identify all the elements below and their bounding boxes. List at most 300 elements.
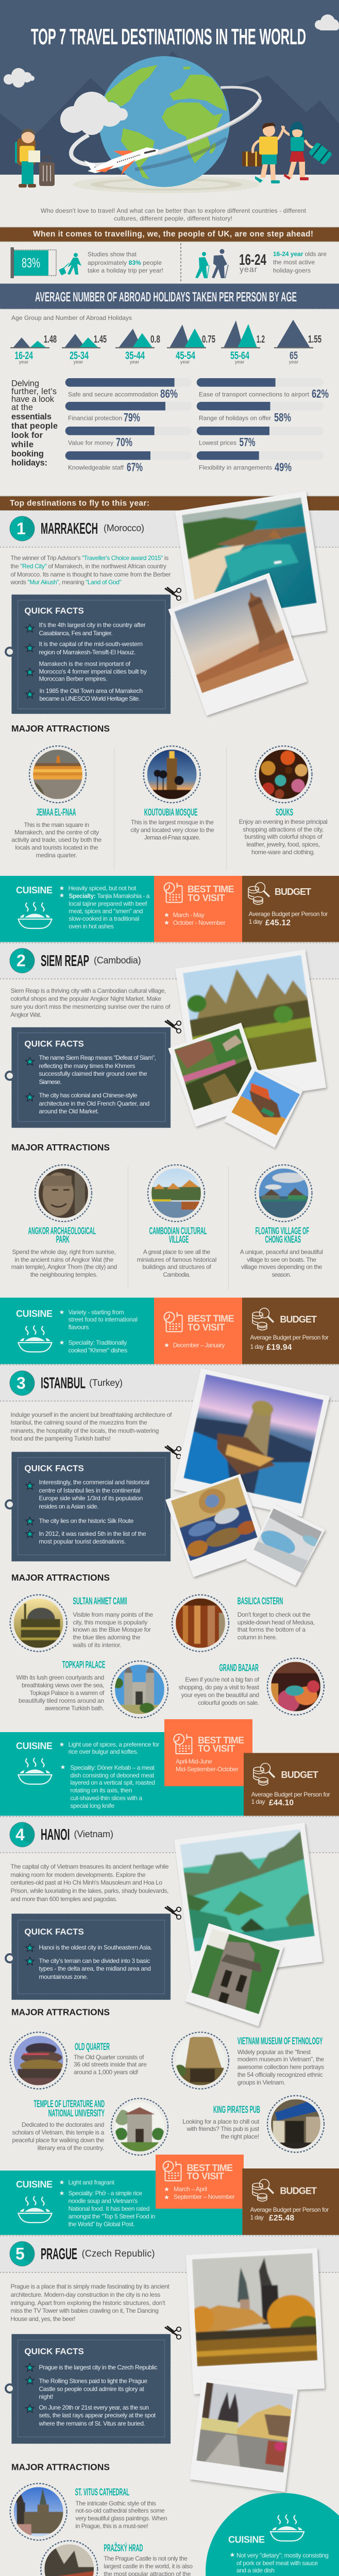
strip: best time to visit: TO VISIT	[187, 2171, 224, 2181]
description: minarets, the hospitality of the locals, the mouth-watering	[10, 1427, 159, 1434]
chart: booking essentials bars	[65, 378, 329, 474]
city name: (Czech Republic)	[82, 2248, 155, 2259]
orbit ring front	[71, 99, 260, 170]
quick facts: Castle so people could admire its glory at	[39, 2385, 144, 2393]
city name: MARRAKECH	[41, 519, 98, 537]
attraction: Cambodian Cultural Village: Cambodia.	[163, 1271, 191, 1278]
strip: budget: 1 day	[250, 1343, 264, 1350]
quick facts: QUICK FACTS	[24, 1927, 84, 1937]
city name: (Cambodia)	[94, 955, 141, 965]
strip: cuisine	[0, 876, 154, 942]
description: making room for modern developments. Explore the	[10, 1871, 146, 1878]
attraction: Vietnam Museum of Ethnology: Widely popular as the "finest	[238, 2048, 311, 2056]
attraction: Topkapi Palace: With its lush green courtyards and	[16, 1674, 104, 1681]
attraction: Temple of Literature: NATIONAL UNIVERSITY	[48, 2108, 105, 2119]
attraction: King Pirates Pub: Looking for a place to chill out	[182, 2118, 260, 2125]
text block: delving further: booking	[11, 449, 44, 459]
text block: delving further	[11, 379, 58, 468]
chart: holidays by age group: year	[235, 360, 244, 365]
description: food and the pampering Turkish baths!	[10, 1435, 111, 1442]
description: Indulge yourself in the ancient but breathtaking architecture of	[10, 1411, 172, 1418]
polaroid: Angkor Wat	[175, 950, 326, 1107]
chart: holidays by age group: 1.45	[94, 334, 107, 345]
strip: cuisine: noodle soup and Vietnam's	[69, 2197, 138, 2205]
attraction: St. Vitus Cathedral: in Prague, this is a must-see!	[75, 2522, 148, 2530]
stat: 83%	[10, 247, 163, 278]
quick facts: mountainous zone.	[39, 1973, 88, 1980]
attraction: Topkapi Palace: awesome Turkish bath.	[45, 1705, 104, 1712]
attraction: Prazsky Hrad	[41, 2541, 195, 2576]
attraction: Vietnam Museum of Ethnology: the 54 officially recognized ethnic	[238, 2071, 323, 2078]
quick facts	[5, 1020, 181, 1128]
attraction: Old Quarter	[10, 2032, 147, 2089]
polaroid: ceramic bowls	[165, 1474, 268, 1577]
attraction: Temple of Literature: literary era of the country.	[38, 2144, 104, 2151]
icon: hikers	[195, 249, 228, 278]
strip: cuisine: layered on a vertical spit, roasted	[70, 1779, 155, 1786]
attraction: Koutoubia Mosque: KOUTOUBIA MOSQUE	[144, 807, 198, 818]
attraction: St. Vitus Cathedral: not-so-old cathedral shelters some	[75, 2507, 165, 2514]
chart: holidays by age group: 16-24	[14, 350, 33, 362]
attraction: Prazsky Hrad: The Prague Castle is not only the	[104, 2555, 188, 2562]
strip: cuisine: flavours	[69, 1324, 89, 1331]
attraction: Souks: bursting with colorful shops of	[245, 833, 323, 840]
quick facts: It is the capital of the mid-south-western	[39, 640, 143, 648]
attraction: Old Quarter: OLD QUARTER	[75, 2042, 110, 2053]
strip: best time to visit: TO VISIT	[188, 1323, 225, 1333]
panel: 2 Siem Reap	[0, 942, 339, 1364]
attraction: Basilica Cistern: BASILICA CISTERN	[238, 1596, 283, 1607]
attraction: Cambodian Cultural Village: VILLAGE	[169, 1234, 189, 1245]
number badge	[10, 1371, 35, 1396]
text block: delving further: while	[11, 440, 33, 449]
subheading: age group: Age Group and Number of Abroad Holidays	[11, 314, 132, 321]
attraction: St. Vitus Cathedral	[10, 2483, 167, 2540]
strip: best time to visit	[156, 2155, 244, 2209]
description	[10, 1411, 172, 1442]
attraction: King Pirates Pub	[182, 2096, 324, 2153]
quick facts: The city has colonial and Chinese-style	[39, 1092, 138, 1099]
description: sure you don't miss the mesmerizing sunrise over the ruins of	[10, 1003, 171, 1010]
description: House and, yes, the beer!	[10, 2315, 75, 2323]
attraction: Souks: SOUKS	[276, 807, 293, 818]
panel: 4 Hanoi	[0, 1816, 339, 2235]
globe	[99, 56, 230, 187]
attraction: Grand Bazaar: colourful goods on sale.	[198, 1699, 259, 1706]
attraction: Topkapi Palace	[16, 1660, 168, 1718]
text block: delving further: that people	[11, 421, 58, 431]
attraction: Topkapi Palace: breathtaking views over the sea,	[22, 1682, 104, 1689]
description: colorful shops and the popular Angkor Night Market. Make	[10, 995, 161, 1003]
polaroid: Pamukkale	[246, 1504, 326, 1586]
chart: holidays by age group: year	[130, 360, 139, 365]
description: Istanbul, the calming sound of the muezzins from the	[10, 1419, 147, 1426]
attraction: Vietnam Museum of Ethnology: modern museum in Vietnam", the	[238, 2056, 324, 2063]
quick facts: The name Siem Reap means "Defeat of Siam",	[39, 1054, 156, 1061]
text: Studies show that	[88, 250, 137, 258]
city name: SIEM REAP	[41, 952, 89, 970]
description	[10, 2283, 170, 2323]
strip: budget: £44.10	[269, 1799, 294, 1807]
strip: cuisine: National food. It has been rated	[69, 2205, 149, 2212]
strip: budget: Average Budget per Person for	[250, 2206, 329, 2213]
attraction: Temple of Literature: TEMPLE OF LITERATURE AND	[34, 2099, 105, 2110]
banner: top destinations: Top destinations to fly to this year:	[10, 499, 149, 508]
orbit ring back	[221, 87, 260, 99]
description	[10, 1863, 169, 1903]
attraction: Souks: shopping attractions of the city,	[243, 826, 324, 833]
strip: best time to visit	[164, 1719, 252, 1786]
quick facts	[5, 1446, 181, 1562]
quick facts: In 2012, it was ranked 5th in the list of the	[39, 1530, 146, 1537]
strip: budget: Average Budget per Person for	[249, 910, 328, 918]
polaroid: Koutoubia tower	[168, 573, 307, 716]
strip: cuisine: Heavily spiced, but not hot	[69, 885, 137, 892]
city name: (Turkey)	[89, 1378, 123, 1388]
banner: UK one step ahead: When it comes to travelling, we, the people of UK, are one step ahead!	[33, 230, 313, 239]
strip: best time to visit: BEST TIME	[198, 1735, 244, 1745]
text block: delving further: essentials	[11, 412, 52, 421]
chart: booking essentials bars: 79%	[124, 411, 140, 424]
description: words "Mur Akush", meaning "Land of God"	[10, 579, 122, 586]
strip: budget: Average Budget per Person for	[251, 1791, 330, 1798]
chart: booking essentials bars: 58%	[274, 411, 291, 424]
strip: best time to visit	[154, 1298, 242, 1364]
chart: holidays by age group: 1.48	[44, 334, 57, 345]
strip: cuisine: Light and fragrant	[69, 2179, 115, 2186]
number badge: 2	[16, 952, 26, 970]
description: Angkor Wat.	[10, 1011, 41, 1019]
quick facts: sets, the last rays appear precisely at the spot	[39, 2412, 156, 2419]
number badge	[10, 2242, 35, 2266]
attraction: Cambodian Cultural Village: CAMBODIAN CULTURAL	[149, 1226, 207, 1237]
text block: delving further: holidays:	[11, 459, 47, 468]
characters: high-fiving couple	[242, 122, 333, 183]
mountains	[0, 51, 339, 175]
strip: best time to visit: December – January	[173, 1342, 225, 1349]
description	[10, 987, 171, 1019]
quick facts: became a UNESCO World Heritage Site.	[39, 695, 140, 702]
attraction: Vietnam Museum of Ethnology: groups in Vietnam.	[238, 2079, 285, 2086]
strip: cuisine: CUISINE	[16, 1309, 53, 1319]
suitcase	[39, 157, 55, 186]
attraction: King Pirates Pub: KING PIRATES PUB	[213, 2105, 260, 2115]
stat: 16-24 year olds: 16-24 year olds are	[273, 250, 327, 258]
attraction: Basilica Cistern: column in here.	[238, 1634, 277, 1641]
quick facts: On June 20th or 21st every year, as the sun	[39, 2404, 149, 2411]
strip: budget	[242, 876, 339, 942]
airplane	[84, 147, 159, 182]
strip: budget: £45.12	[265, 919, 291, 927]
attraction: Basilica Cistern	[172, 1595, 315, 1652]
strip: best time to visit: BEST TIME	[187, 2163, 233, 2173]
quick facts: QUICK FACTS	[24, 1464, 84, 1473]
heading: average number of abroad holidays	[0, 283, 339, 309]
chart: booking essentials bars: Range of holidays on offer	[199, 414, 271, 421]
callout: cuisine circle: of pork or beef meat with sauce	[236, 2560, 318, 2567]
chart: booking essentials bars: 62%	[312, 387, 329, 400]
attraction: Grand Bazaar: GRAND BAZAAR	[219, 1663, 259, 1674]
description	[10, 554, 171, 586]
attraction: Sultan Ahmet Camii: SULTAN AHMET CAMII	[73, 1596, 127, 1607]
quick facts: Hanoi is the oldest city in Southeastern Asia.	[39, 1944, 152, 1951]
city name: PRAGUE	[41, 2245, 77, 2263]
stat: 83%: 83%	[22, 255, 40, 270]
chart: holidays by age group: 1.2	[257, 334, 265, 345]
heading: major attractions: MAJOR ATTRACTIONS	[11, 723, 110, 734]
strip: best time to visit	[154, 876, 242, 942]
attraction: Prazsky Hrad: PRAŽSKÝ HRAD	[104, 2543, 143, 2554]
quick facts: Morocco's 4 former imperial cities built by	[39, 668, 147, 675]
attraction: Cambodian Cultural Village: A great place to see all the	[143, 1248, 211, 1256]
attraction: Koutoubia Mosque: city and located very close to the	[130, 826, 214, 834]
attraction: Prazsky Hrad: largest castle in the world, it is also	[104, 2563, 193, 2570]
chart: holidays by age group: 25-34	[70, 350, 89, 362]
quick facts: Interestingly, the commercial and historical	[39, 1479, 149, 1486]
attraction: Sultan Ahmet Camii: walls of its interior.	[72, 1641, 122, 1649]
chart: booking essentials bars: 70%	[116, 435, 132, 449]
strip: budget: £19.94	[266, 1343, 292, 1352]
quick facts: In 1985 the Old Town area of Marrakech	[39, 687, 143, 694]
attraction: Koutoubia Mosque: This is the largest mosque in the	[131, 819, 214, 826]
attraction: Floating Village of Chong Kneas: village moves depending on the	[241, 1263, 323, 1270]
strip: budget	[242, 1298, 339, 1364]
icon: walker with suitcase	[59, 253, 81, 276]
quick facts: Moroccan Berber empires.	[39, 675, 107, 682]
polaroid: Charles Bridge	[186, 2248, 325, 2394]
panel: 3 Istanbul	[0, 1364, 339, 1816]
chart: booking essentials bars: Ease of transport connections to airport	[199, 391, 310, 398]
quick facts: The Rolling Stones paid to light the Prague	[39, 2377, 147, 2384]
quick facts: QUICK FACTS	[24, 2346, 84, 2357]
quick facts: QUICK FACTS	[24, 606, 84, 616]
attraction: Old Quarter: 36 old streets inside that are	[74, 2061, 147, 2068]
attraction: Temple of Literature	[12, 2098, 168, 2155]
number badge	[10, 516, 35, 541]
attraction: Koutoubia Mosque	[130, 746, 214, 841]
strip: best time to visit: September – November	[174, 2193, 235, 2200]
strip: cuisine	[0, 2171, 242, 2235]
attraction: Souks: leather, jewelry, food, spices,	[246, 841, 320, 848]
attraction: Angkor Archaeological Park	[11, 1165, 117, 1278]
polaroid: Maiden's Tower resort	[173, 1368, 330, 1517]
chart: holidays by age group: 1.55	[308, 334, 321, 345]
strip: cuisine	[0, 1298, 154, 1364]
quick facts: architecture in the Old French Quarter, and	[39, 1100, 149, 1107]
quick facts: Casablanca, Fes and Tangier.	[39, 630, 112, 637]
strip: cuisine: meat, spices and "smen" and	[69, 908, 143, 915]
chart: booking essentials bars: Safe and secure accommodation	[68, 391, 158, 398]
strip: budget: 1 day	[251, 1798, 265, 1805]
attraction: Floating Village of Chong Kneas: village to see on boats. The	[247, 1256, 316, 1263]
city name: (Vietnam)	[74, 1829, 113, 1839]
strip: cuisine: special long knife	[70, 1802, 114, 1809]
polaroid: Thap Rua turtle tower	[185, 1923, 283, 2026]
attraction: Floating Village of Chong Kneas: A unique, peaceful and beautiful	[240, 1248, 323, 1256]
chart: booking essentials bars: Lowest prices	[199, 439, 236, 446]
strip: cuisine: Speciality: Traditionally	[69, 1339, 127, 1346]
strip: budget: 1 day	[250, 2214, 264, 2221]
description: Prague is a place that is simply made fascinating by its ancient	[10, 2283, 170, 2290]
attraction: Jemaa el-Fnaa: JEMAA EL-FNAA	[36, 807, 76, 818]
strip: budget: £25.48	[269, 2214, 294, 2223]
text block: delving further: at the	[11, 403, 33, 412]
cloud: top right	[315, 14, 339, 30]
strip: best time to visit: Mid-September-October	[176, 1766, 239, 1773]
attraction: Cambodian Cultural Village: buildings and structures of	[142, 1263, 212, 1270]
polaroid: Ha Long Bay	[174, 1823, 323, 1978]
chart: holidays by age group: year	[19, 360, 28, 365]
quick facts: The city's terrain can be divided into 3 basic	[39, 1957, 150, 1964]
quick facts: region of Marrakesh-Tensift-El Haouz.	[39, 649, 136, 656]
strip: cuisine: Light use of spices, a preference for	[69, 1741, 159, 1748]
attraction: Temple of Literature: Dedicated to the doctorates and	[22, 2121, 104, 2128]
attraction: Temple of Literature: peaceful place for walking down the	[12, 2137, 105, 2144]
chart: booking essentials bars: 57%	[239, 435, 256, 449]
attraction: Vietnam Museum of Ethnology	[172, 2032, 324, 2089]
character: backpacker	[15, 129, 55, 188]
attraction: Grand Bazaar: Even if you're not a big fan of	[185, 1676, 260, 1683]
attraction: Angkor Archaeological Park: main temple), Angkor Thom (the city) and	[11, 1263, 117, 1270]
attraction: Angkor Archaeological Park: Spend the whole day, right from sunrise,	[12, 1248, 116, 1256]
quick facts: centre of Istanbul lies in the continental	[39, 1487, 140, 1494]
stat: 16-24 year olds: holiday-goers	[273, 267, 311, 274]
chart: booking essentials bars: Flexibility in arrangements	[199, 464, 272, 471]
quick facts: most popular tourist destinations.	[39, 1538, 126, 1545]
chart: booking essentials bars: Value for money	[68, 439, 113, 446]
strip: cuisine: Variety - starting from	[69, 1309, 124, 1316]
heading: major attractions: MAJOR ATTRACTIONS	[11, 2462, 110, 2472]
cloud: left	[4, 68, 35, 88]
attraction: Old Quarter: around a 1,000 years old!	[74, 2069, 139, 2076]
city name: ISTANBUL	[41, 1374, 86, 1392]
attraction: Souks	[239, 746, 328, 856]
number badge	[10, 1822, 35, 1847]
attraction: Sultan Ahmet Camii: city, this mosque is popularly	[73, 1619, 147, 1626]
attraction: Floating Village of Chong Kneas: season.	[272, 1271, 291, 1278]
attraction: Grand Bazaar: shopping, do pay a visit to feast	[179, 1684, 260, 1691]
strip: best time to visit: TO VISIT	[188, 893, 225, 903]
chart: holidays by age group: 65	[290, 350, 298, 362]
strip: cuisine	[0, 1732, 244, 1816]
text	[88, 250, 163, 274]
attraction: Jemaa el-Fnaa: locals and tourists located in the	[15, 844, 98, 851]
city name: (Morocco)	[104, 523, 144, 533]
attraction: Basilica Cistern: Don't forget to check out the	[238, 1611, 311, 1618]
strip: best time to visit: BEST TIME	[188, 884, 234, 894]
attraction: Sultan Ahmet Camii: the blue tiles adorning the	[73, 1634, 141, 1641]
attraction: Angkor Archaeological Park: ANGKOR ARCHAEOLOGICAL	[28, 1226, 96, 1237]
quick facts: types - the delta area, the midland area and	[39, 1965, 151, 1972]
text: take a holiday trip per year!	[88, 267, 163, 274]
callout: cuisine circle	[206, 2493, 339, 2576]
quick facts: Prague is the largest city in the Czech Republic	[39, 2364, 158, 2371]
strip: cuisine: cooked "Khmer" dishes	[69, 1347, 127, 1354]
strip: budget: BUDGET	[280, 2186, 317, 2196]
attraction: Floating Village of Chong Kneas: CHONG KNEAS	[265, 1234, 301, 1245]
callout: cuisine circle: CUISINE	[228, 2535, 265, 2545]
attraction: Koutoubia Mosque: Jemaa el-Fnaa square.	[144, 834, 200, 841]
chart: holidays by age group: 0.75	[202, 334, 215, 345]
intro text: Who doesn't love to travel! And what can be better than to explore different countries - different	[41, 207, 307, 214]
ground shadow ellipses	[73, 176, 260, 193]
attraction: Cambodian Cultural Village	[137, 1165, 216, 1278]
attraction: Jemaa el-Fnaa: This is the main square in	[24, 821, 89, 828]
attraction: St. Vitus Cathedral: The intricate Gothic style of this	[75, 2500, 156, 2507]
polaroid: coastline	[175, 492, 326, 651]
polaroid: Cambodian house	[168, 1023, 269, 1127]
number badge: 1	[16, 519, 26, 538]
attraction: Angkor Archaeological Park: PARK	[56, 1234, 70, 1245]
quick facts: Europe side while 1/3rd of its population	[39, 1495, 143, 1502]
attraction: King Pirates Pub: the right place!	[221, 2133, 259, 2140]
description: architecture. Modern-day construction in the city is no less	[10, 2291, 160, 2298]
strip: budget	[242, 2168, 339, 2235]
description: Prison, while luxuriating in the lakes, parks, shady boulevards,	[10, 1887, 169, 1894]
strip: cuisine: cut-shaved-thin slices with a	[70, 1794, 142, 1802]
number badge: 5	[15, 2245, 25, 2263]
strip: budget	[244, 1753, 339, 1816]
attraction: Grand Bazaar: your eyes on the beautiful and	[181, 1691, 259, 1699]
strip: best time to visit: BEST TIME	[188, 1314, 234, 1324]
panel: 5 Prague	[0, 2235, 339, 2576]
strip: best time to visit: March - May	[173, 911, 205, 919]
stat: 16-24 year olds: 16-24	[239, 251, 266, 268]
quick facts: around the Old Market.	[39, 1108, 99, 1115]
quick facts: It's the 4th largest city in the country after	[39, 621, 146, 629]
chart: booking essentials bars: 86%	[160, 387, 178, 400]
attraction: Jemaa el-Fnaa	[11, 746, 102, 859]
quick facts: where the remains of St. Vitus are buried.	[38, 2420, 145, 2427]
attraction: Souks: Enjoy an evening in these principal	[239, 818, 328, 825]
chart: holidays by age group: year	[289, 360, 298, 365]
chart: booking essentials bars: Financial protection	[68, 414, 122, 421]
strip: cuisine: the World" by Global Post.	[69, 2221, 135, 2228]
heading: major attractions: MAJOR ATTRACTIONS	[11, 1572, 110, 1583]
chart: holidays by age group: year	[180, 360, 190, 365]
heading: major attractions: MAJOR ATTRACTIONS	[11, 1142, 110, 1153]
strip: cuisine: rice over bulgur and koftes.	[69, 1748, 139, 1755]
cloud: large	[60, 92, 128, 135]
attraction: Old Quarter: The Old Quarter consists of	[74, 2054, 144, 2061]
description: of Morocco. Its name is thought to have come from the Berber	[10, 571, 171, 578]
attraction: King Pirates Pub: with friends? This pub is just	[187, 2125, 260, 2132]
description: The winner of Trip Advisor's "Traveller's Choice award 2015" is	[10, 554, 168, 562]
number badge: 3	[16, 1374, 26, 1393]
polaroid: boat	[224, 1067, 303, 1148]
quick facts: night!	[39, 2393, 54, 2400]
description: intriguing. Apart from exploring the historic structures, don't	[10, 2299, 165, 2307]
text block: delving further: look for	[11, 431, 43, 440]
strip: cuisine: CUISINE	[16, 885, 53, 895]
attraction: Sultan Ahmet Camii	[10, 1595, 153, 1652]
text block: delving further: have a look	[11, 395, 55, 404]
chart: holidays by age group: year	[74, 360, 83, 365]
text block: delving further: Delving	[11, 379, 39, 388]
strip: cuisine: local tajine prepared with beef	[69, 900, 147, 907]
strip: cuisine: oven in hot ashes	[69, 923, 114, 930]
strip: cuisine: Speciality: Döner Kebab – a meat	[70, 1764, 155, 1771]
chart: booking essentials bars: 67%	[127, 461, 143, 474]
quick facts	[5, 1906, 181, 2000]
attraction: Sultan Ahmet Camii: known as the Blue Mosque for	[73, 1626, 151, 1633]
banner: UK one step ahead	[0, 227, 339, 242]
strip: budget: Average Budget per Person for	[250, 1334, 329, 1341]
callout: cuisine circle: and a side dish	[236, 2567, 275, 2574]
attraction: Jemaa el-Fnaa: activity and trade, used by both the	[11, 836, 102, 843]
quick facts	[5, 587, 181, 714]
city name	[41, 2245, 155, 2263]
